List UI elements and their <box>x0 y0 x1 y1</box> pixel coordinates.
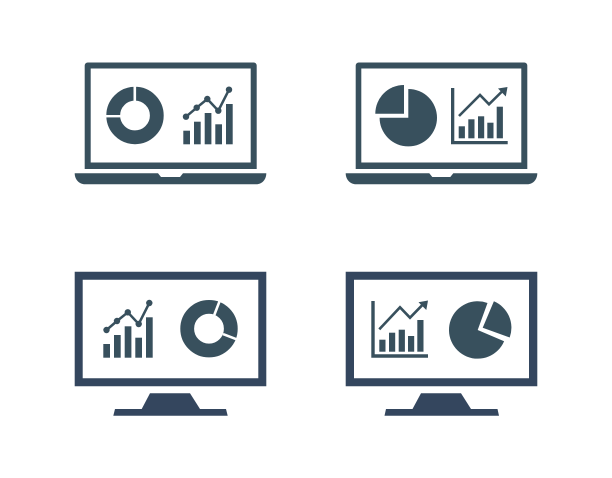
icon: laptop with donut and line-bar chart <box>75 62 266 184</box>
laptop screen frame <box>356 62 527 169</box>
monitor frame <box>75 272 266 386</box>
pie chart <box>449 301 511 359</box>
laptop base <box>346 173 537 184</box>
monitor stand <box>384 393 499 416</box>
bar chart with arrow <box>371 300 428 358</box>
bar chart with line <box>183 86 233 144</box>
icon: laptop with pie and arrow chart <box>346 62 537 184</box>
monitor frame <box>346 272 537 386</box>
icon: monitor with arrow chart and pie <box>346 272 537 416</box>
laptop base <box>75 173 266 184</box>
laptop screen frame <box>85 62 257 169</box>
monitor stand <box>113 393 228 416</box>
donut chart <box>187 300 238 351</box>
icon: monitor with line-bar chart and donut <box>75 272 266 416</box>
pie chart <box>375 85 437 146</box>
donut chart <box>105 85 157 137</box>
bar chart with arrow <box>451 87 508 144</box>
bar chart with line <box>103 300 153 358</box>
